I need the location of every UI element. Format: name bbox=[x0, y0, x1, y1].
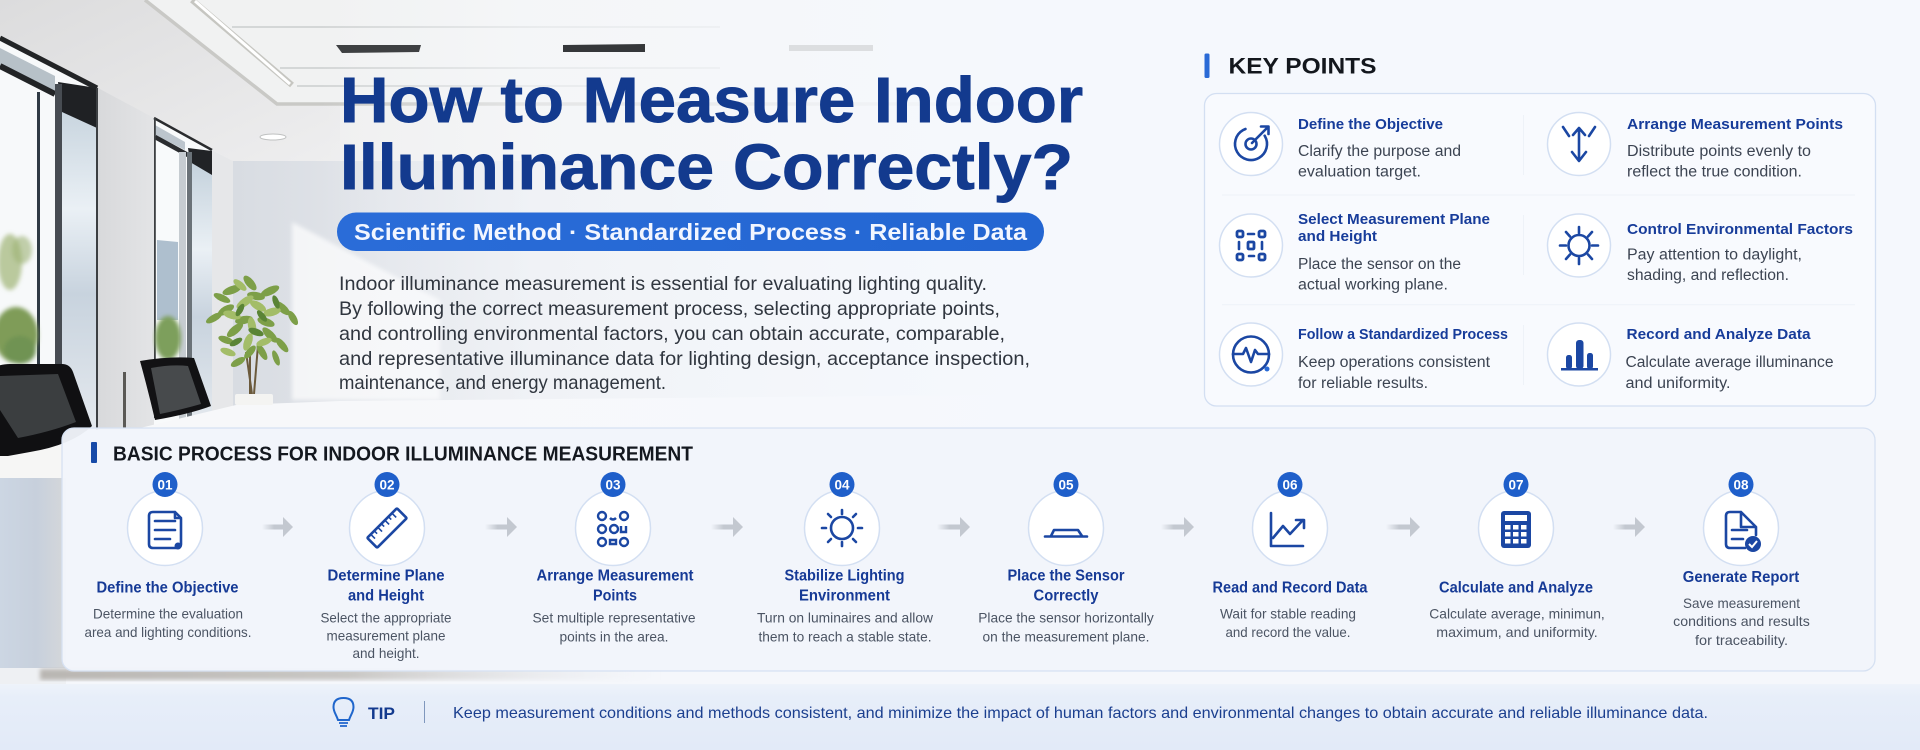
key point: select measurement plane and height: Place the sensor on the bbox=[1298, 256, 1461, 273]
key point: control environmental factors: Control Environmental Factors bbox=[1627, 221, 1853, 238]
step 02: 02 bbox=[379, 478, 395, 492]
window 1 bbox=[0, 38, 97, 430]
arrow 5 bbox=[1161, 517, 1194, 537]
key point: record and analyze data: Record and Analyze Data bbox=[1626, 326, 1811, 343]
chair: left bbox=[0, 364, 126, 456]
key point: record and analyze data bbox=[1548, 323, 1834, 392]
step 08: for traceability. bbox=[1695, 633, 1788, 648]
step 02: and height. bbox=[352, 646, 420, 661]
key point: control environmental factors: shading, and reflection. bbox=[1627, 267, 1789, 284]
step 04: them to reach a stable state. bbox=[758, 630, 932, 644]
step 06: and record the value. bbox=[1226, 625, 1350, 640]
key point: follow a standardized process: Follow a Standardized Process bbox=[1298, 326, 1508, 343]
table bbox=[140, 395, 1000, 440]
arrow 6 bbox=[1386, 517, 1420, 537]
key point: record and analyze data: Calculate average illuminance bbox=[1626, 354, 1834, 371]
title: Illuminance Correctly? bbox=[340, 131, 1073, 203]
step 08: Save measurement bbox=[1683, 596, 1800, 611]
subtitle pill bbox=[337, 212, 1044, 251]
step 04 bbox=[757, 472, 933, 644]
arrow 2 bbox=[485, 517, 517, 537]
intro paragraph bbox=[339, 273, 1030, 394]
step 04: Environment bbox=[799, 588, 890, 604]
step 04: Stabilize Lighting bbox=[784, 568, 904, 584]
tip label: TIP bbox=[368, 705, 395, 723]
arrow 7 bbox=[1613, 517, 1645, 537]
key point: define the objective: evaluation target. bbox=[1298, 164, 1421, 180]
key point: define the objective: Define the Objective bbox=[1298, 116, 1443, 133]
arrow 1 bbox=[262, 517, 293, 537]
step 05: on the measurement plane. bbox=[982, 630, 1150, 644]
process heading: BASIC PROCESS FOR INDOOR ILLUMINANCE MEASUREMENT bbox=[113, 444, 693, 466]
lower floor bbox=[0, 430, 1920, 690]
back wall bbox=[233, 161, 1000, 461]
step 02: Determine Plane bbox=[328, 568, 445, 584]
step 02: Select the appropriate bbox=[320, 610, 452, 626]
key point: follow a standardized process: Keep operations consistent bbox=[1298, 354, 1491, 371]
key point: arrange measurement points: Arrange Measurement Points bbox=[1627, 116, 1843, 133]
step 02 bbox=[320, 472, 452, 661]
intro paragraph: maintenance, and energy management. bbox=[339, 372, 666, 394]
building in window bbox=[157, 240, 178, 320]
key point: select measurement plane and height: actual working plane. bbox=[1298, 276, 1448, 294]
step 05: Place the Sensor bbox=[1008, 568, 1124, 584]
step 08 bbox=[1673, 472, 1810, 648]
step 03: Points bbox=[593, 588, 637, 604]
photo fade to white bbox=[320, 0, 1040, 470]
intro paragraph: and controlling environmental factors, you can obtain accurate, comparable, bbox=[339, 323, 1005, 345]
step 01: Define the Objective bbox=[96, 580, 239, 596]
icon: light bulb bbox=[334, 698, 354, 726]
key points heading: KEY POINTS bbox=[1228, 54, 1376, 78]
step 05: Place the sensor horizontally bbox=[978, 610, 1154, 626]
key point: control environmental factors bbox=[1548, 214, 1853, 284]
intro paragraph: By following the correct measurement process, selecting appropriate points, bbox=[339, 298, 1000, 320]
step 05: Correctly bbox=[1034, 588, 1099, 604]
step 02: measurement plane bbox=[326, 628, 446, 644]
step 07: Calculate and Analyze bbox=[1439, 580, 1593, 596]
step 05: 05 bbox=[1058, 478, 1074, 492]
title bbox=[340, 64, 1083, 203]
key point: arrange measurement points: Distribute points evenly to bbox=[1627, 143, 1811, 160]
step 04: Turn on luminaires and allow bbox=[757, 610, 933, 626]
arrow 4 bbox=[937, 517, 970, 537]
ceiling bbox=[0, 0, 1000, 161]
key point: select measurement plane and height: and Height bbox=[1298, 228, 1377, 245]
tip text: Keep measurement conditions and methods consistent, and minimize the impact of human factors and environmental changes to obtain accurate and reliable illuminance data. bbox=[453, 705, 1708, 722]
step 08: Generate Report bbox=[1683, 569, 1799, 586]
panel: key points bbox=[1204, 94, 1876, 406]
panel: basic process bbox=[62, 428, 1875, 671]
intro paragraph: Indoor illuminance measurement is essential for evaluating lighting quality. bbox=[339, 273, 987, 295]
key point: define the objective: Clarify the purpose and bbox=[1298, 143, 1461, 160]
step 06: 06 bbox=[1282, 478, 1298, 492]
window 2 bbox=[154, 118, 212, 430]
step 07: 07 bbox=[1508, 478, 1524, 492]
step 01: area and lighting conditions. bbox=[84, 625, 252, 640]
step 07: maximum, and uniformity. bbox=[1436, 625, 1598, 640]
title: How to Measure Indoor bbox=[340, 64, 1083, 136]
tip bar bbox=[0, 684, 1920, 750]
key point: follow a standardized process bbox=[1220, 323, 1508, 392]
step 01: Determine the evaluation bbox=[93, 606, 243, 622]
arrow 3 bbox=[711, 517, 743, 537]
key point: select measurement plane and height: Select Measurement Plane bbox=[1298, 211, 1490, 228]
step 07: Calculate average, minimun, bbox=[1429, 606, 1605, 622]
step 07 bbox=[1429, 472, 1605, 640]
step 01: 01 bbox=[157, 478, 173, 492]
key point: define the objective bbox=[1220, 112, 1461, 180]
step 03 bbox=[532, 472, 696, 644]
ceiling lights bbox=[336, 44, 873, 53]
intro paragraph: and representative illuminance data for lighting design, acceptance inspection, bbox=[339, 348, 1030, 370]
step 06: Read and Record Data bbox=[1212, 580, 1368, 596]
subtitle pill: Scientific Method · Standardized Process · Reliable Data bbox=[354, 219, 1027, 245]
plant bbox=[204, 274, 300, 405]
step 04: 04 bbox=[834, 478, 850, 492]
step 06 bbox=[1212, 472, 1368, 640]
column bbox=[98, 88, 154, 433]
trees behind window 1 bbox=[0, 234, 38, 364]
key point: arrange measurement points: reflect the true condition. bbox=[1627, 164, 1802, 180]
step 03: Set multiple representative bbox=[532, 610, 696, 626]
step 06: Wait for stable reading bbox=[1220, 606, 1356, 622]
step 01 bbox=[84, 472, 252, 640]
step 03: Arrange Measurement bbox=[536, 568, 694, 584]
chair: right bbox=[140, 357, 211, 420]
step 08: 08 bbox=[1733, 478, 1749, 492]
key point: arrange measurement points bbox=[1548, 112, 1843, 180]
key point: follow a standardized process: for reliable results. bbox=[1298, 375, 1428, 392]
key point: select measurement plane and height bbox=[1220, 211, 1490, 294]
step 02: and Height bbox=[348, 588, 424, 604]
step 05 bbox=[978, 472, 1154, 644]
step 08: conditions and results bbox=[1673, 614, 1810, 629]
key point: control environmental factors: Pay attention to daylight, bbox=[1627, 246, 1802, 264]
step 03: points in the area. bbox=[560, 630, 668, 644]
step 03: 03 bbox=[605, 478, 621, 492]
key point: record and analyze data: and uniformity. bbox=[1626, 375, 1730, 392]
